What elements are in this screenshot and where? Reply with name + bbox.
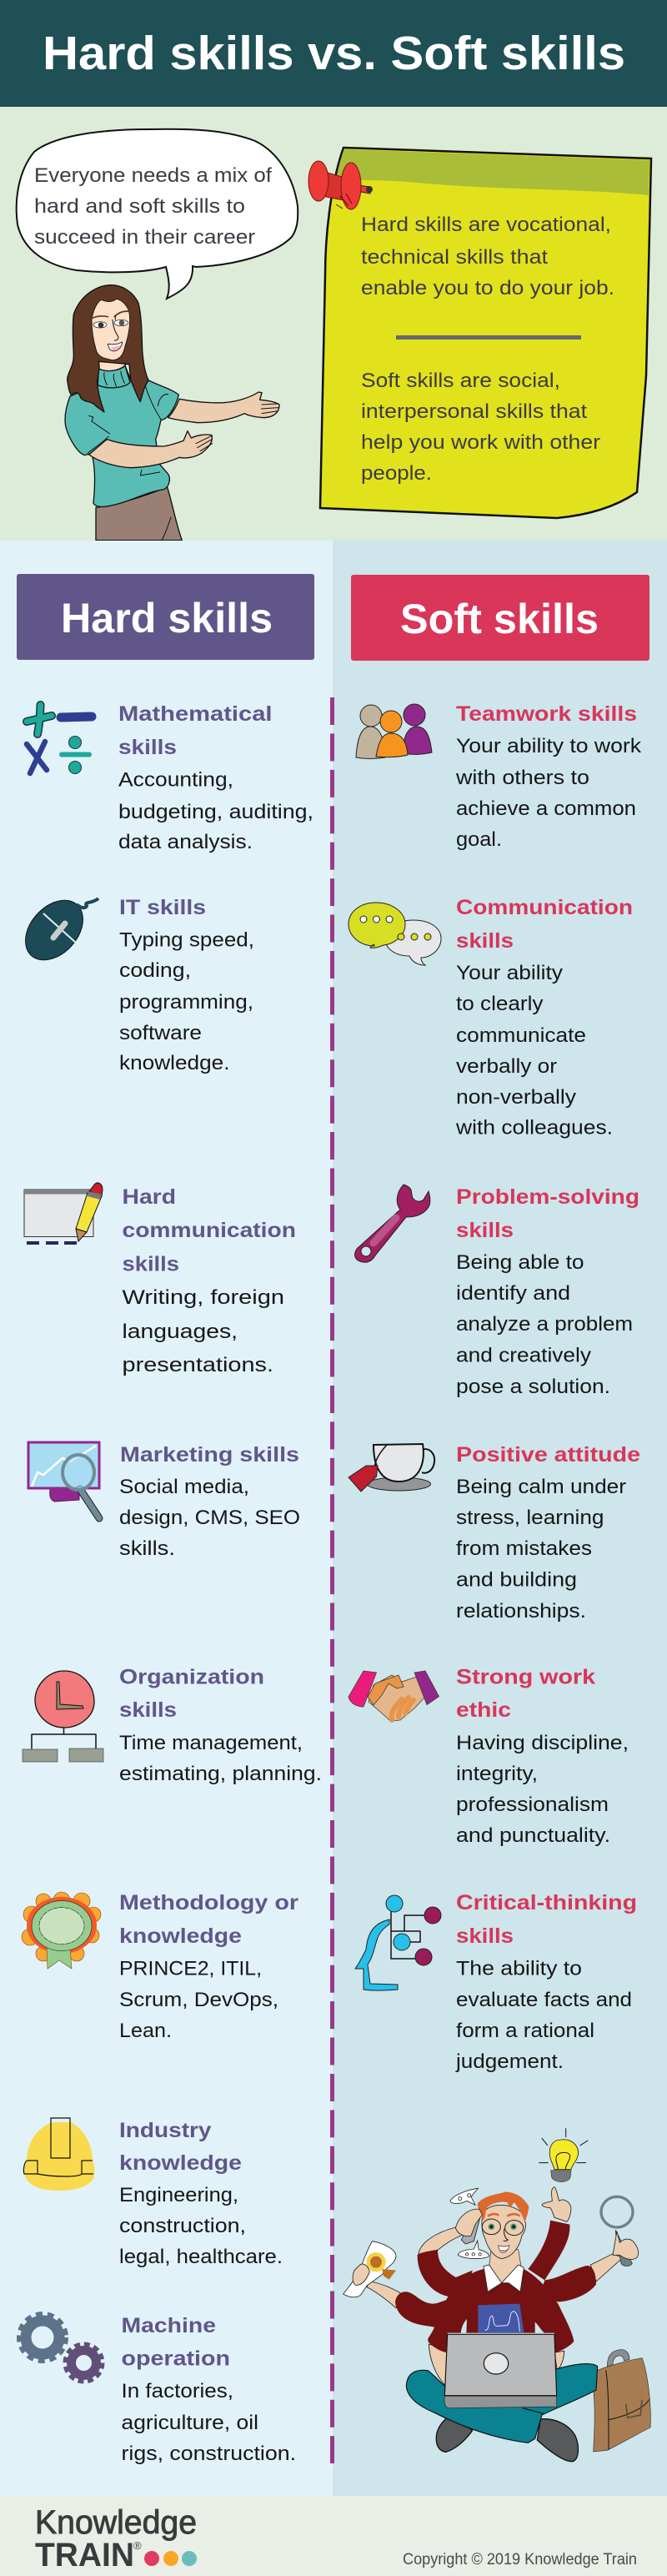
skill: problem-solving: Being able to [456,1251,584,1274]
skill: problem-solving: identify and [456,1282,570,1305]
right column background [333,541,667,2496]
logo: Knowledge Train: TRAIN [35,2537,134,2573]
definition: hard skills: enable you to do your job. [361,277,614,299]
intro panel [0,107,667,541]
skill: mathematical: Mathematical [118,702,272,726]
icon: gears [18,2314,103,2382]
icon: phone and speech [450,2188,489,2259]
definition: soft skills: help you work with other [361,431,600,454]
icon: board and pencil [24,1183,103,1243]
skill: communication: non-verbally [456,1086,577,1109]
definition: soft skills: Soft skills are social, [361,370,560,392]
skill: marketing: Social media, [119,1476,249,1498]
icon: computer mouse [14,889,98,971]
skill: industry knowledge [23,2118,283,2268]
skill: strong work ethic: Having discipline, [456,1732,629,1754]
skill: critical-thinking: skills [456,1924,514,1948]
skill: marketing: skills. [119,1537,175,1560]
skill: mathematical [27,702,313,853]
skill: problem-solving: Problem-solving [456,1185,639,1209]
speech bubble [17,129,298,299]
skill: positive attitude: relationships. [456,1600,586,1623]
skill: industry knowledge: construction, [119,2215,246,2237]
bare arms [367,2187,623,2308]
skill: organization: skills [119,1698,177,1722]
icon: diploma scroll [344,2241,396,2297]
skill: teamwork: with others to [455,767,589,789]
skill: machine operation [18,2314,296,2465]
skill: hard communication: communication [122,1219,296,1242]
sweater [395,2221,596,2352]
shoes [436,2418,578,2462]
skill: strong work ethic: integrity, [456,1763,538,1785]
skill: IT: coding, [119,959,191,982]
skill: organization: estimating, planning. [119,1763,322,1785]
skill: hard communication: Writing, foreign [122,1286,284,1309]
skill: machine operation: In factories, [122,2380,233,2402]
skill: marketing: design, CMS, SEO [119,1507,300,1529]
icon: three people [356,704,432,759]
skill: methodology: Lean. [119,2020,172,2042]
skill: machine operation: Machine [122,2314,216,2337]
skill: positive attitude: Being calm under [456,1476,626,1498]
skill: communication: verbally or [456,1055,557,1078]
header banner [0,0,667,107]
skill: mathematical: skills [118,736,177,759]
icon: speech bubbles [349,903,441,965]
skill: methodology: PRINCE2, ITIL, [119,1957,262,1980]
skill: problem-solving [355,1185,639,1398]
skill: communication: skills [456,929,514,953]
skill: positive attitude: from mistakes [456,1537,592,1560]
icon: rosette award [22,1892,101,1969]
skill: strong work ethic: and punctuality. [456,1824,610,1847]
skill: communication: Your ability [456,962,564,984]
heading: soft skills [351,575,649,661]
icon: briefcase [590,2350,650,2452]
icon: red push pin [308,161,373,209]
skill: organization: Time management, [119,1732,303,1754]
heading: hard skills: Hard skills [61,595,273,641]
skill: methodology: Scrum, DevOps, [119,1989,278,2011]
sticky note [320,148,651,518]
skill: teamwork: goal. [456,828,502,851]
icon: light bulb [539,2129,588,2181]
icon: laptop [444,2334,557,2413]
skill: industry knowledge: Engineering, [119,2184,238,2206]
character: multitasking man [344,2129,650,2462]
skill: industry knowledge: Industry [119,2119,212,2142]
skill: methodology [22,1891,298,2042]
skill: critical-thinking [355,1891,637,2073]
legs [406,2364,598,2443]
definition: soft skills [361,370,600,485]
skill: problem-solving: pose a solution. [456,1376,610,1398]
skill: industry knowledge: legal, healthcare. [119,2246,283,2268]
skill: teamwork: achieve a common [456,797,636,820]
skill: positive attitude: stress, learning [456,1507,604,1529]
skill: positive attitude: and building [456,1569,577,1592]
logo: Knowledge Train: Knowledge [35,2504,197,2541]
icon: wrench [355,1185,430,1262]
skill: organization [23,1666,322,1785]
skill: machine operation: rigs, construction. [122,2443,296,2465]
footer [0,2496,667,2576]
logo: Knowledge Train: ® [133,2539,142,2552]
skill: mathematical: budgeting, auditing, [118,801,313,823]
skill: critical-thinking: form a rational [456,2020,594,2042]
skill: IT: IT skills [119,896,206,919]
skill: IT: programming, [119,991,253,1014]
definition: soft skills: interpersonal skills that [361,400,587,423]
icon: tea cup [349,1444,434,1492]
skill: strong work ethic: ethic [456,1698,511,1722]
skill: machine operation: agriculture, oil [122,2412,258,2434]
skill: critical-thinking: The ability to [456,1957,582,1980]
icon: clock and org chart [23,1671,103,1762]
skill: communication: Communication [456,896,633,919]
skill: marketing [28,1442,300,1560]
character: woman presenting [65,285,279,541]
left column background [0,541,333,2496]
skill: critical-thinking: judgement. [455,2050,564,2073]
skill: problem-solving: and creatively [456,1345,592,1367]
skill: marketing: Marketing skills [120,1443,299,1467]
skill: machine operation: operation [122,2347,230,2371]
skill: communication: to clearly [456,993,544,1015]
skill: organization: Organization [119,1666,264,1689]
heading: hard skills [17,574,314,660]
icon: head with decision nodes [355,1895,441,1990]
skill: hard communication: skills [122,1253,179,1276]
skill: hard communication: presentations. [122,1354,273,1376]
logo: Knowledge Train [35,2504,197,2573]
skill: hard communication: languages, [122,1321,238,1343]
icon: math symbols [27,705,92,774]
skill: IT: knowledge. [119,1052,230,1074]
skill: methodology: Methodology or [119,1891,298,1914]
icon: monitor and magnifier [28,1442,99,1518]
speech bubble: succeed in their career [34,226,255,249]
icon: magnifying glass [601,2196,639,2266]
skill: critical-thinking: evaluate facts and [456,1989,632,2011]
speech bubble: hard and soft skills to [34,195,245,218]
icon: handshake [349,1671,439,1721]
icon: hard hat [23,2118,94,2191]
skill: hard communication: Hard [122,1185,176,1209]
skill: industry knowledge: knowledge [119,2151,242,2175]
hips [429,2344,564,2386]
definition: hard skills [361,214,614,299]
skill: strong work ethic [349,1666,629,1847]
skill: problem-solving: skills [456,1219,514,1242]
speech bubble: Everyone needs a mix of [34,164,272,187]
definition: soft skills: people. [361,462,432,485]
skill: strong work ethic: Strong work [456,1666,595,1689]
skill: communication: with colleagues. [455,1116,613,1140]
skill: IT [14,889,254,1074]
skill: critical-thinking: Critical-thinking [456,1891,637,1914]
skill: teamwork: Your ability to work [456,735,642,757]
definition: hard skills: Hard skills are vocational, [361,214,611,236]
skill: mathematical: Accounting, [118,769,233,791]
skill: IT: Typing speed, [119,929,254,951]
skill: communication [349,896,633,1140]
skill: positive attitude [349,1443,640,1623]
skill: teamwork: Teamwork skills [456,702,637,726]
shirt logo [478,2304,524,2333]
skill: methodology: knowledge [119,1924,242,1948]
skill: hard communication [24,1183,296,1376]
skill: teamwork [356,702,642,851]
copyright: Copyright © 2019 Knowledge Train [403,2551,637,2568]
skill: communication: communicate [456,1024,586,1047]
skill: strong work ethic: professionalism [456,1794,609,1816]
skill: IT: software [119,1022,202,1044]
definition: hard skills: technical skills that [361,246,548,269]
skill: positive attitude: Positive attitude [456,1443,640,1467]
skill: problem-solving: analyze a problem [456,1313,633,1336]
title: Hard skills vs. Soft skills [43,27,625,80]
head and collar [478,2191,529,2292]
heading: soft skills: Soft skills [400,596,599,642]
skill: mathematical: data analysis. [118,831,253,853]
